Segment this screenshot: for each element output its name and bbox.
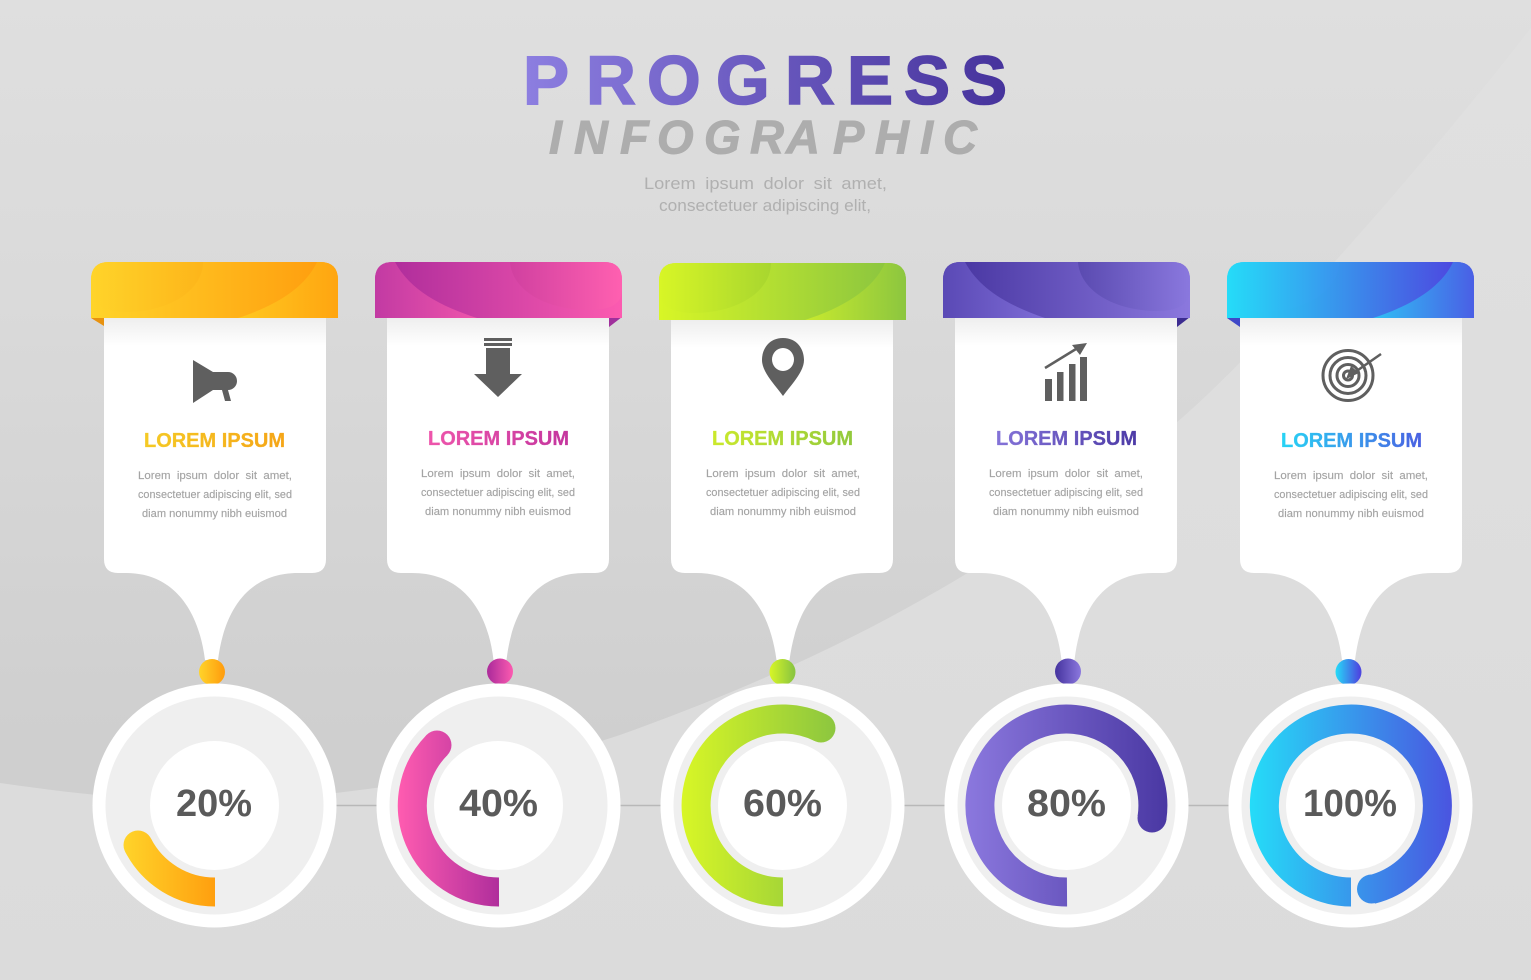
card body with funnel bbox=[387, 318, 609, 660]
card body with funnel bbox=[955, 318, 1177, 660]
connector dot bbox=[199, 659, 225, 685]
progress arc bbox=[696, 719, 821, 892]
icon: location pin bbox=[762, 338, 804, 396]
connector dot bbox=[1055, 658, 1081, 684]
fold bbox=[1227, 318, 1240, 327]
percentage: 60% bbox=[743, 783, 822, 825]
description: Lorem ipsum dolor sit amet, bbox=[138, 470, 292, 482]
connector dot bbox=[487, 658, 513, 684]
description: Lorem ipsum dolor sit amet, bbox=[706, 468, 860, 480]
body top shade bbox=[104, 318, 326, 346]
subtitle: consectetuer adipiscing elit, bbox=[659, 197, 871, 215]
progress arc bbox=[1264, 719, 1437, 892]
subtitle bbox=[644, 175, 887, 215]
title line: INFOGRAPHIC: INFOGRAPHIC bbox=[549, 110, 978, 164]
description: consectetuer adipiscing elit, sed bbox=[989, 487, 1143, 499]
description: consectetuer adipiscing elit, sed bbox=[1274, 489, 1428, 501]
description: consectetuer adipiscing elit, sed bbox=[706, 487, 860, 499]
progress ring 60% bbox=[660, 684, 904, 928]
body top shade bbox=[955, 318, 1177, 346]
icon: download arrow bbox=[474, 338, 522, 397]
progress arc bbox=[412, 745, 499, 892]
icon: target bbox=[1323, 350, 1381, 400]
body top shade bbox=[1240, 318, 1462, 346]
card body with funnel bbox=[671, 320, 893, 660]
icon: growth chart bbox=[1045, 343, 1087, 401]
description bbox=[138, 470, 292, 520]
description bbox=[1274, 470, 1428, 520]
header band bbox=[659, 263, 906, 320]
connector dot bbox=[1336, 659, 1362, 685]
connector line bbox=[330, 804, 1235, 806]
progress ring 80% bbox=[944, 684, 1188, 928]
title bbox=[523, 42, 1007, 164]
description: diam nonummy nibh euismod bbox=[993, 506, 1139, 518]
fold bbox=[91, 318, 104, 326]
panel: step 4 purple bbox=[943, 262, 1190, 928]
body top shade bbox=[671, 320, 893, 348]
percentage: 100% bbox=[1303, 783, 1397, 825]
panel: step 2 pink bbox=[375, 262, 622, 928]
progress ring 100% bbox=[1228, 684, 1472, 928]
description bbox=[706, 468, 860, 518]
header band bbox=[1227, 262, 1474, 318]
card body with funnel bbox=[104, 318, 326, 660]
title line: PROGRESS: PROGRESS bbox=[523, 42, 1007, 119]
card body with funnel bbox=[1240, 318, 1462, 660]
description: Lorem ipsum dolor sit amet, bbox=[1274, 470, 1428, 482]
description: Lorem ipsum dolor sit amet, bbox=[421, 468, 575, 480]
header band bbox=[375, 262, 622, 318]
header band bbox=[91, 262, 338, 318]
description: diam nonummy nibh euismod bbox=[710, 506, 856, 518]
heading: LOREM IPSUM bbox=[1281, 429, 1422, 452]
subtitle: Lorem ipsum dolor sit amet, bbox=[644, 175, 887, 193]
panel: step 3 green bbox=[659, 263, 906, 928]
heading: LOREM IPSUM bbox=[144, 429, 285, 452]
panel: step 1 yellow bbox=[91, 262, 338, 928]
connector dot bbox=[770, 659, 796, 685]
description: diam nonummy nibh euismod bbox=[1278, 508, 1424, 520]
header band bbox=[943, 262, 1190, 318]
progress arc bbox=[980, 719, 1153, 892]
description: consectetuer adipiscing elit, sed bbox=[421, 487, 575, 499]
description bbox=[989, 468, 1143, 518]
progress ring 40% bbox=[376, 684, 620, 928]
description: diam nonummy nibh euismod bbox=[425, 506, 571, 518]
description: consectetuer adipiscing elit, sed bbox=[138, 489, 292, 501]
progress ring 20% bbox=[92, 684, 336, 928]
heading: LOREM IPSUM bbox=[428, 427, 569, 450]
progress arc bbox=[138, 845, 215, 892]
heading: LOREM IPSUM bbox=[996, 427, 1137, 450]
description: Lorem ipsum dolor sit amet, bbox=[989, 468, 1143, 480]
body top shade bbox=[387, 318, 609, 346]
percentage: 80% bbox=[1027, 783, 1106, 825]
percentage: 20% bbox=[176, 783, 252, 825]
fold bbox=[1177, 317, 1190, 327]
description: diam nonummy nibh euismod bbox=[142, 508, 287, 520]
fold bbox=[609, 317, 622, 327]
panel: step 5 blue bbox=[1227, 262, 1474, 928]
heading: LOREM IPSUM bbox=[712, 427, 853, 450]
description bbox=[421, 468, 575, 518]
percentage: 40% bbox=[459, 783, 538, 825]
icon: megaphone bbox=[193, 360, 237, 403]
